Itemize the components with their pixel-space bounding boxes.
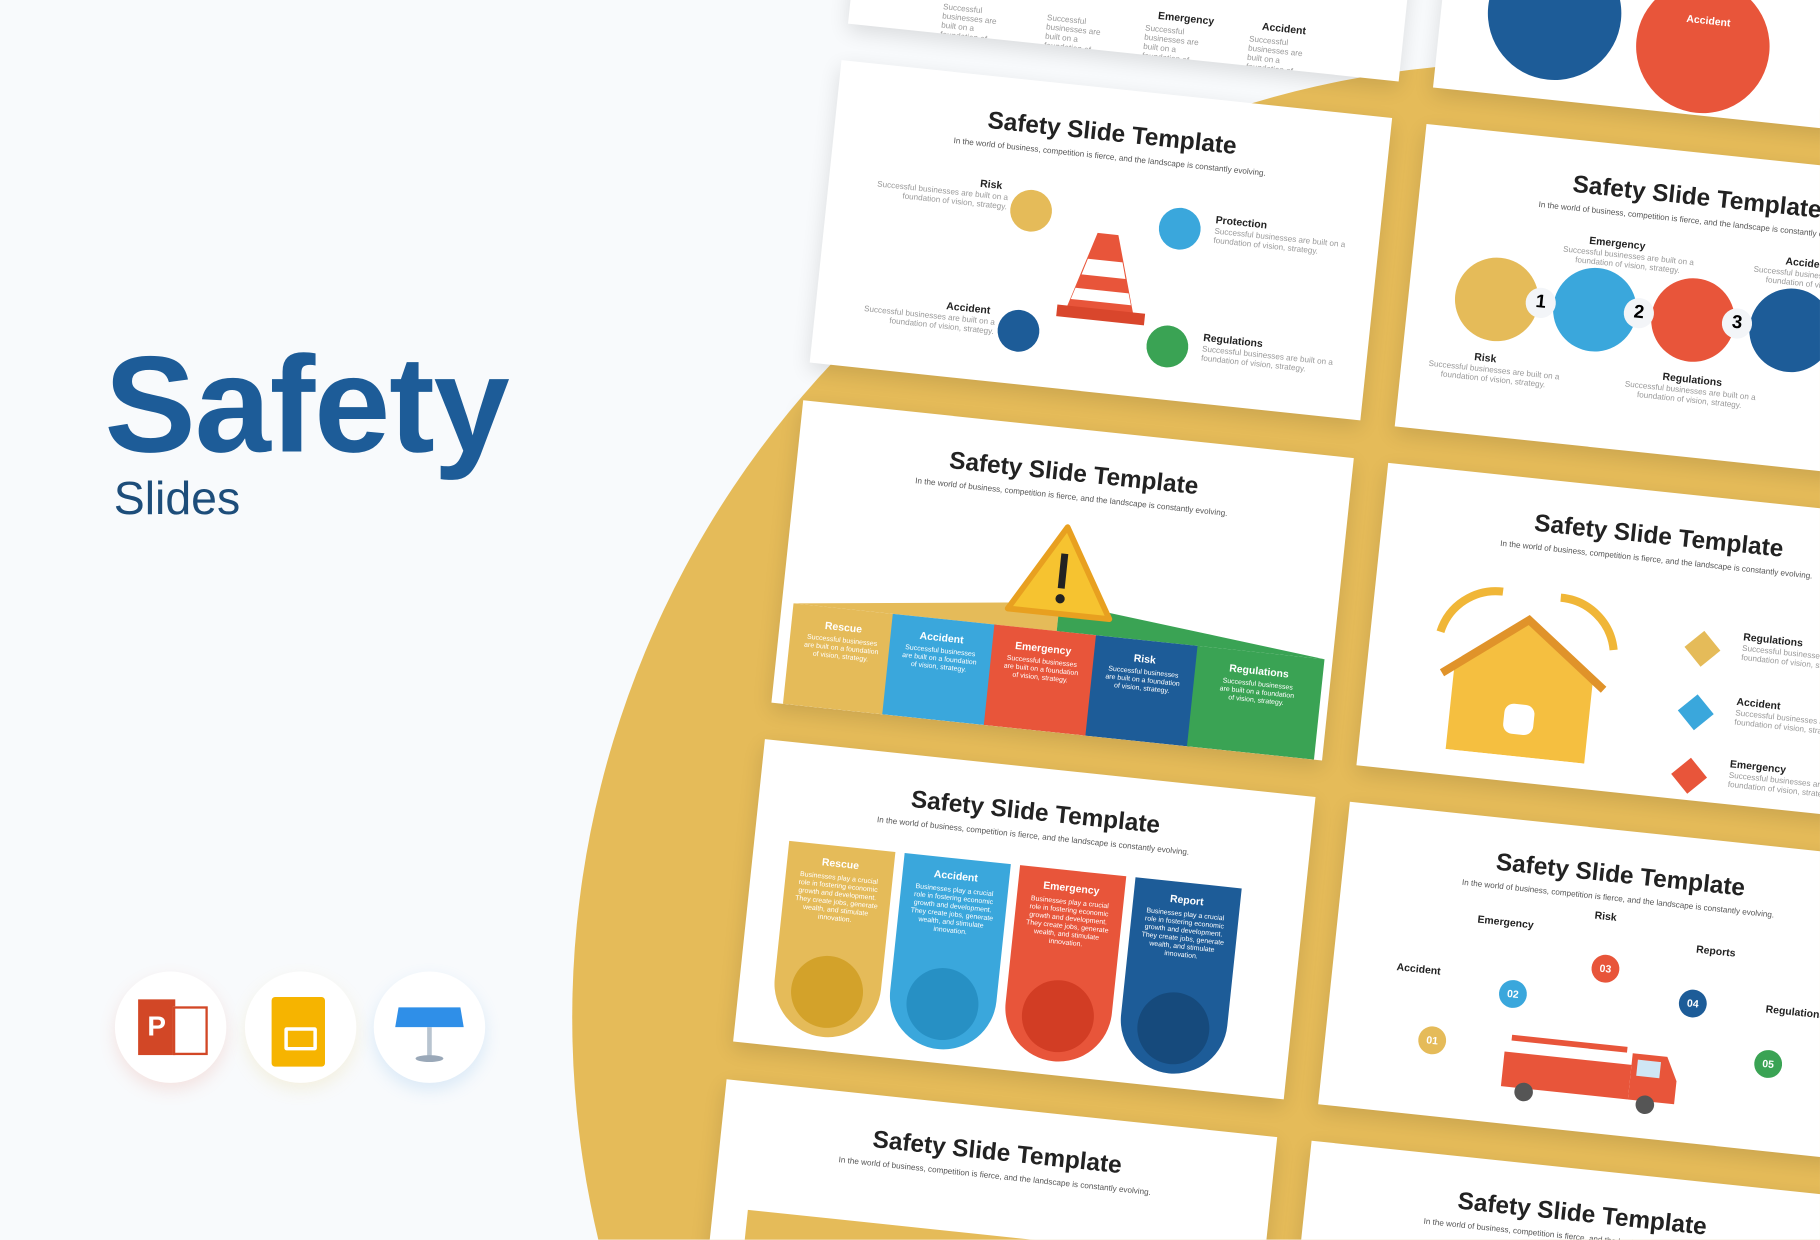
icon: PowerPoint: P xyxy=(147,1011,166,1042)
slide: house alarm xyxy=(1356,463,1820,823)
slide: cone: Safety Slide Template xyxy=(986,107,1238,160)
slide: warning tent: Accident xyxy=(919,630,964,646)
slide: circles row: Successful businesses are built on a foundation of vision, strategy. xyxy=(1563,246,1694,275)
icon: traffic cone xyxy=(1056,232,1146,326)
slide: bottom left: Safety Slide Template xyxy=(871,1126,1123,1179)
slide: house alarm: Safety Slide Template xyxy=(1533,510,1785,563)
slide: fire truck: Safety Slide Template xyxy=(1495,849,1746,902)
slide: warning tent xyxy=(771,400,1354,761)
slide: top left partial: Successful businesses are built on a foundation of vision, strategy. xyxy=(1141,25,1199,75)
slide: top left partial: Accident xyxy=(1261,21,1307,37)
slide: cone: Successful businesses are built on a foundation of vision, strategy. xyxy=(1201,345,1333,374)
slide: circles row: Successful businesses are built on a foundation of vision, strategy. xyxy=(1624,381,1756,410)
slide: fire truck: Risk xyxy=(1594,909,1617,923)
item: Accident: Accident xyxy=(946,300,991,316)
slide: warning tent: Risk xyxy=(1133,652,1156,666)
slide: warning tent: Regulations xyxy=(1229,662,1289,680)
slide: top right partial xyxy=(1433,0,1820,145)
slide: warning tent: Successful businesses are built on a foundation of vision, strategy. xyxy=(1105,666,1180,695)
slide: circles row: 2 xyxy=(1633,302,1645,323)
slide: cone: Regulations xyxy=(1203,332,1263,349)
slide: circles row: Regulations xyxy=(1662,371,1723,388)
slide: circles row: 1 xyxy=(1535,292,1547,313)
background yellow circle xyxy=(572,63,1820,1240)
slide: cone: In the world of business, competition is fierce, and the landscape is constantly evolving. xyxy=(953,137,1266,178)
slide: circles row: Emergency xyxy=(1589,234,1646,252)
slide: top left partial: Emergency xyxy=(1158,10,1215,27)
slide: cone: Successful businesses are built on a foundation of vision, strategy. xyxy=(1213,228,1346,256)
slide: circles row: Successful businesses are built on a foundation of vision, strategy. xyxy=(1428,360,1560,390)
slide: house alarm: In the world of business, competition is fierce, and the landscape is constantly evolving. xyxy=(1500,540,1813,581)
slide: warning tent: Successful businesses are built on a foundation of vision, strategy. xyxy=(1219,678,1294,707)
slide: cone: Successful businesses are built on a foundation of vision, strategy. xyxy=(877,181,1008,212)
slide: top right partial: Accident xyxy=(1686,13,1731,29)
slide: tabs: In the world of business, competition is fierce, and the landscape is constantly evolving. xyxy=(876,816,1190,857)
slide: house alarm: Accident xyxy=(1736,696,1781,712)
slide: warning tent: Emergency xyxy=(1015,640,1072,657)
slide: bottom right xyxy=(1280,1141,1820,1240)
slide: fire truck: 03 xyxy=(1599,962,1612,975)
slide: fire truck: 01 xyxy=(1426,1034,1439,1047)
slide: tabs: Report xyxy=(1169,893,1204,908)
slide: cone xyxy=(810,60,1392,420)
slide: house alarm: Regulations xyxy=(1743,631,1803,649)
slide: bottom left xyxy=(695,1079,1277,1240)
slide: bottom right: Safety Slide Template xyxy=(1456,1188,1708,1240)
slide: fire truck: 04 xyxy=(1686,997,1699,1010)
slide: top left partial: Successful businesses are built on a foundation of vision, strategy. xyxy=(939,3,997,54)
item: Regulations xyxy=(1144,323,1190,369)
slide: house alarm: Emergency xyxy=(1729,758,1787,775)
slide: fire truck: 05 xyxy=(1762,1058,1775,1070)
slide: circles row: 3 xyxy=(1731,313,1743,333)
slide: warning tent: Successful businesses are built on a foundation of vision, strategy. xyxy=(902,644,977,674)
slide: warning tent: Rescue xyxy=(824,620,863,635)
slide: tabs: Safety Slide Template xyxy=(910,786,1161,839)
icon: Keynote xyxy=(374,972,485,1083)
slide: top left partial: Successful businesses are built on a foundation of vision, strategy. xyxy=(1043,14,1101,65)
slide: cone: Successful businesses are built on a foundation of vision, strategy. xyxy=(864,305,995,336)
slide: warning tent: In the world of business, competition is fierce, and the landscape is constantly evolving. xyxy=(915,477,1228,518)
slide: fire truck: In the world of business, competition is fierce, and the landscape is constantly evolving. xyxy=(1461,879,1774,920)
slide: top left partial xyxy=(848,0,1430,81)
slide: tabs xyxy=(733,739,1316,1099)
subtitle: Slides: Slides xyxy=(114,474,240,525)
item: Protection xyxy=(1157,206,1203,252)
slide: tabs: Businesses play a crucial role in fostering economic growth and development. They create jobs, generate wealth, and stimulate innovation. xyxy=(795,871,878,924)
slide: circles row: Safety Slide Template xyxy=(1571,171,1820,224)
slide: tabs: Rescue xyxy=(821,856,860,871)
slide: tabs: Businesses play a crucial role in fostering economic growth and development. They create jobs, generate wealth, and stimulate innovation. xyxy=(1026,895,1109,949)
slide: tabs: Businesses play a crucial role in fostering economic growth and development. They create jobs, generate wealth, and stimulate innovation. xyxy=(910,883,994,937)
icon: Google Slides xyxy=(245,972,356,1083)
slide: tabs: Emergency xyxy=(1043,879,1100,897)
slide: cone: Protection xyxy=(1215,214,1268,231)
slide: fire truck: Accident xyxy=(1396,961,1441,977)
slide: warning tent: Safety Slide Template xyxy=(948,447,1200,500)
title: Safety: Safety xyxy=(104,328,509,482)
slide: fire truck: 02 xyxy=(1507,988,1519,1000)
slide: bottom left: In the world of business, competition is fierce, and the landscape is constantly evolving. xyxy=(838,1156,1151,1197)
slide: warning tent: Successful businesses are built on a foundation of vision, strategy. xyxy=(804,634,879,664)
slide: tabs: Accident xyxy=(933,868,978,884)
slide: warning tent: Successful businesses are built on a foundation of vision, strategy. xyxy=(1003,655,1078,685)
slide: fire truck: Reports xyxy=(1696,943,1736,959)
slide: fire truck: Emergency xyxy=(1477,913,1534,931)
slide: circles row xyxy=(1395,124,1820,484)
icon: PowerPoint xyxy=(115,972,226,1083)
slide: circles row: Risk xyxy=(1474,351,1497,365)
slide: fire truck xyxy=(1318,802,1820,1162)
slide: tabs: Businesses play a crucial role in fostering economic growth and development. They create jobs, generate wealth, and stimulate innovation. xyxy=(1141,908,1224,961)
item: Risk: Risk xyxy=(980,177,1003,191)
